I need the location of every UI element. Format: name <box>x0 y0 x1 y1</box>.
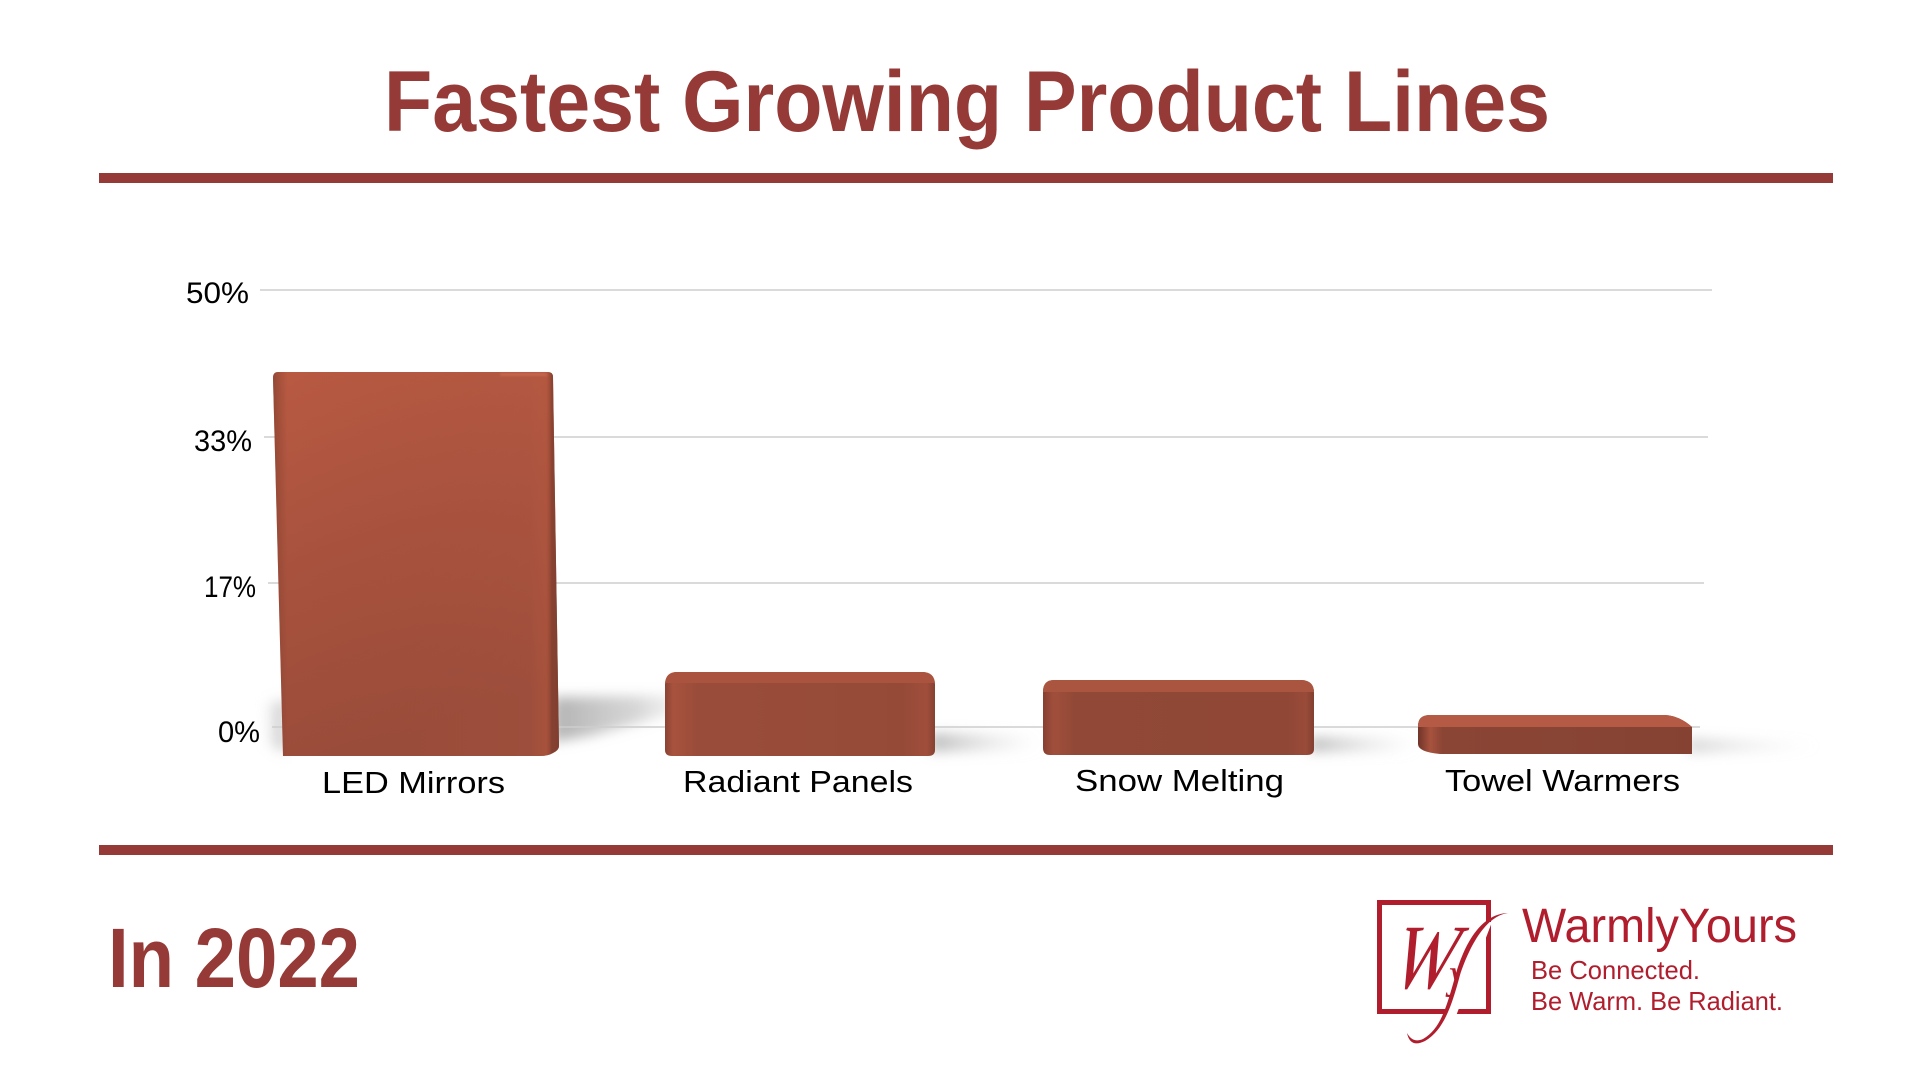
bar: LED Mirrors <box>273 372 559 756</box>
axis label 33%: 33% <box>194 425 252 458</box>
bar: Towel Warmers <box>1418 715 1692 754</box>
tagline line 2: Be Warm. Be Radiant. <box>1531 986 1783 1016</box>
label: Radiant Panels: Radiant Panels <box>683 764 913 799</box>
wordmark: WarmlyYours <box>1522 900 1797 953</box>
icon: Wy monogram: W <box>1385 907 1474 1009</box>
axis label 17%: 17% <box>204 571 256 604</box>
top rule <box>99 173 1833 183</box>
bar shadows <box>262 695 1820 753</box>
title: Fastest Growing Product Lines <box>384 54 1550 150</box>
bar chart <box>273 372 1692 756</box>
axis label 50%: 50% <box>186 277 249 310</box>
bar: Radiant Panels <box>665 672 935 756</box>
tagline line 1: Be Connected. <box>1531 955 1700 985</box>
bar: Snow Melting <box>1043 680 1314 755</box>
y axis labels <box>186 277 260 749</box>
gridlines <box>260 290 1712 727</box>
icon: logo swash <box>1407 913 1508 1043</box>
label: Snow Melting: Snow Melting <box>1075 763 1284 798</box>
category labels <box>322 763 1680 800</box>
label: LED Mirrors: LED Mirrors <box>322 765 505 800</box>
year label: In 2022 <box>108 911 360 1005</box>
label: Towel Warmers: Towel Warmers <box>1445 763 1680 798</box>
axis label 0%: 0% <box>218 716 260 749</box>
icon: Wy monogram: y <box>1445 952 1468 998</box>
icon: logo square <box>1380 902 1488 1012</box>
logo: WarmlyYours <box>1380 900 1797 1043</box>
bottom rule <box>99 845 1833 855</box>
